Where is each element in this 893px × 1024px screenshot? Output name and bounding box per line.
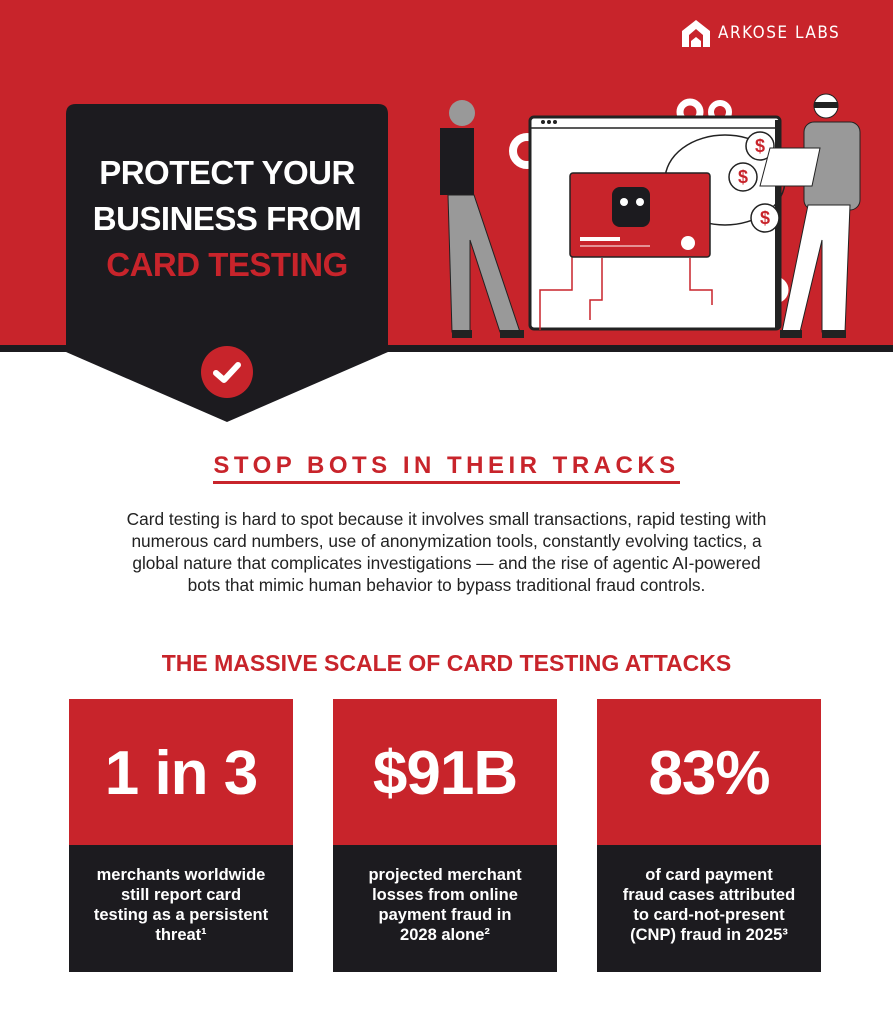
intro paragraph: global nature that complicates investigations — and the rise of agentic AI-powered <box>132 553 761 573</box>
hero background <box>0 0 893 346</box>
stat: $91B: $91B <box>373 739 517 808</box>
intro paragraph <box>127 509 766 595</box>
card <box>570 173 710 257</box>
window <box>530 117 780 329</box>
logo <box>682 20 840 47</box>
illustration: $ <box>760 208 770 228</box>
heading: massive scale: THE MASSIVE SCALE OF CARD TESTING ATTACKS <box>162 650 731 676</box>
stat: $91B: projected merchant <box>368 866 522 884</box>
intro paragraph: numerous card numbers, use of anonymization tools, constantly evolving tactics, a <box>131 531 762 551</box>
title text <box>93 154 361 283</box>
stat: $91B: losses from online <box>372 886 518 904</box>
stat: 83% <box>597 699 821 972</box>
title text: CARD TESTING <box>106 246 348 283</box>
stat: $91B: 2028 alone² <box>400 926 490 944</box>
title text: BUSINESS FROM <box>93 200 361 237</box>
title shield <box>66 104 388 422</box>
stat: 1 in 3 <box>69 699 293 972</box>
stat: 83%: to card-not-present <box>633 906 785 924</box>
stat: 83%: 83% <box>648 739 770 808</box>
stat: 1 in 3: still report card <box>121 886 241 904</box>
heading: stop bots: STOP BOTS IN THEIR TRACKS <box>213 452 680 479</box>
stat: $91B: payment fraud in <box>379 906 511 924</box>
stat: 1 in 3: testing as a persistent <box>94 906 268 924</box>
illustration: $ <box>738 167 748 187</box>
intro paragraph: Card testing is hard to spot because it involves small transactions, rapid testing with <box>127 509 766 529</box>
stat: 83%: fraud cases attributed <box>623 886 795 904</box>
stat: 1 in 3: 1 in 3 <box>105 739 257 808</box>
logo: ARKOSE LABS <box>718 23 840 43</box>
woman <box>449 100 475 126</box>
coins <box>729 132 779 232</box>
hacker <box>814 94 838 118</box>
stat: 83%: of card payment <box>645 866 773 884</box>
stat: 1 in 3: threat¹ <box>155 926 207 944</box>
intro paragraph: bots that mimic human behavior to bypass traditional fraud controls. <box>188 575 705 595</box>
illustration: $ <box>755 136 765 156</box>
stat: 83%: (CNP) fraud in 2025³ <box>630 926 788 944</box>
stat: 1 in 3: merchants worldwide <box>97 866 265 884</box>
illustration <box>440 94 860 338</box>
title text: PROTECT YOUR <box>99 154 355 191</box>
gears <box>513 137 541 165</box>
icon: check badge <box>201 346 253 398</box>
stat: $91B <box>333 699 557 972</box>
